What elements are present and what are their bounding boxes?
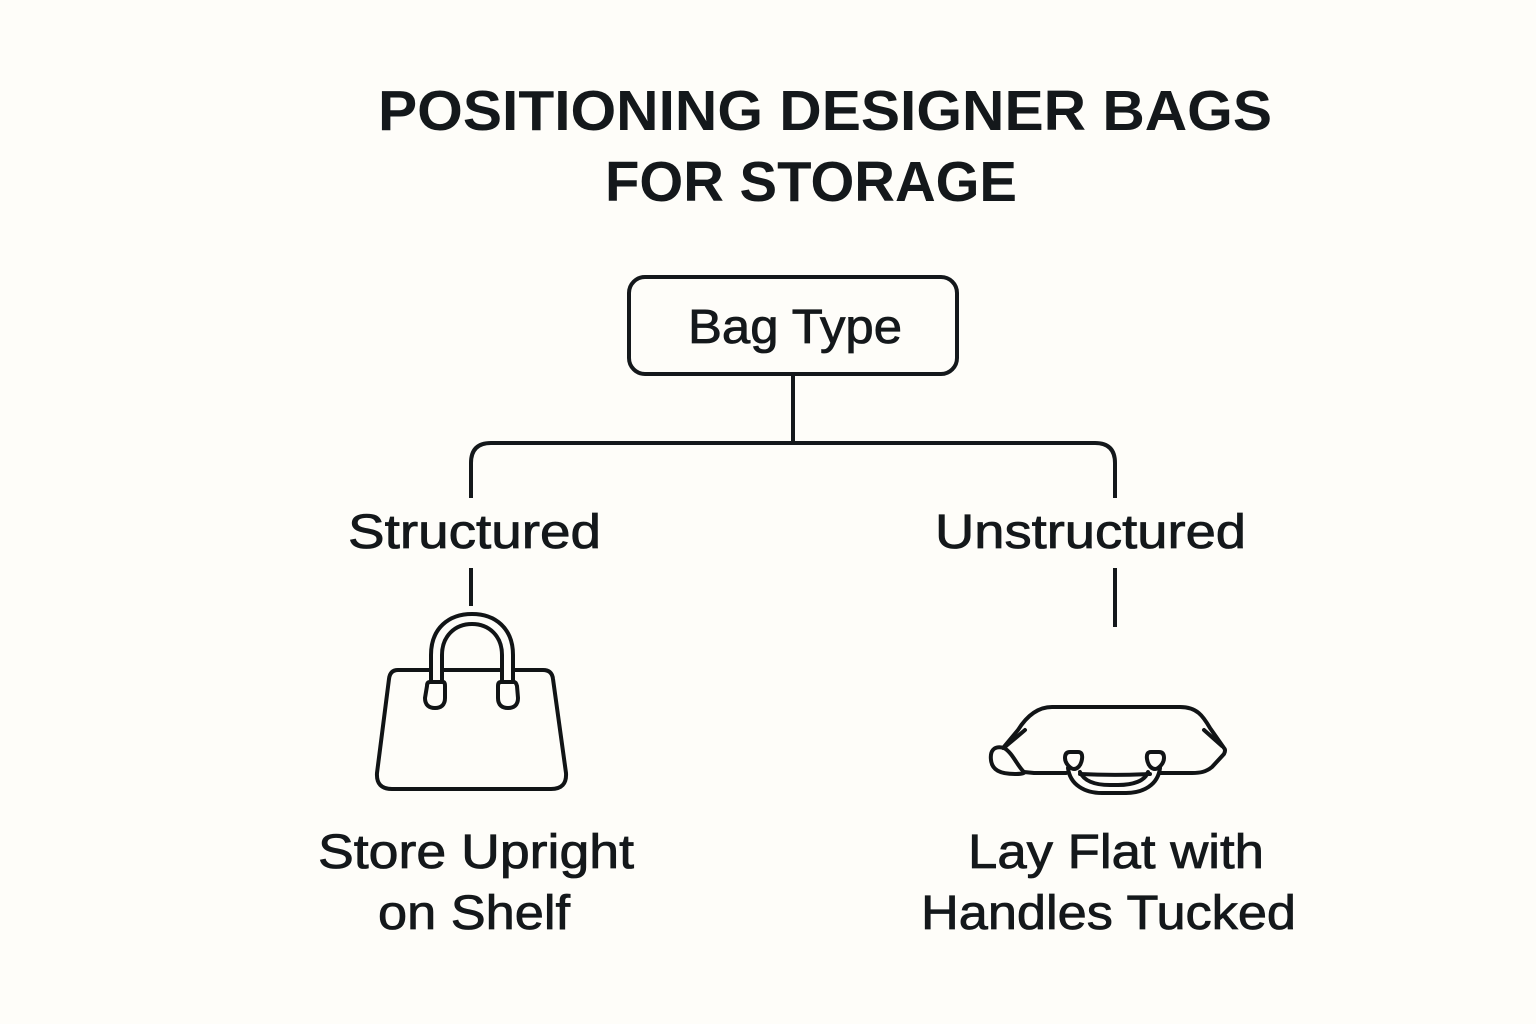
connector: tree branches xyxy=(471,374,1115,498)
root node: Bag Type: Bag Type xyxy=(688,301,902,354)
caption: Store Upright on Shelf xyxy=(318,826,634,940)
caption: Lay Flat with Handles Tucked: Lay Flat with xyxy=(968,826,1264,879)
title: FOR STORAGE xyxy=(605,150,1017,214)
caption: Lay Flat with Handles Tucked xyxy=(921,826,1296,940)
arrow line: Structured to icon xyxy=(469,568,473,606)
title: POSITIONING DESIGNER BAGS xyxy=(378,79,1272,143)
root node: Bag Type xyxy=(629,277,957,374)
label: Unstructured: Unstructured xyxy=(935,506,1246,559)
caption: Lay Flat with Handles Tucked: Handles Tucked xyxy=(921,887,1296,940)
icon: flat unstructured bag xyxy=(991,707,1225,793)
title xyxy=(378,79,1272,214)
label: Structured: Structured xyxy=(348,506,601,559)
caption: Store Upright on Shelf: Store Upright xyxy=(318,826,634,879)
icon: upright structured handbag xyxy=(377,614,566,789)
arrow line: Unstructured to icon xyxy=(1113,568,1117,627)
caption: Store Upright on Shelf: on Shelf xyxy=(378,887,571,940)
